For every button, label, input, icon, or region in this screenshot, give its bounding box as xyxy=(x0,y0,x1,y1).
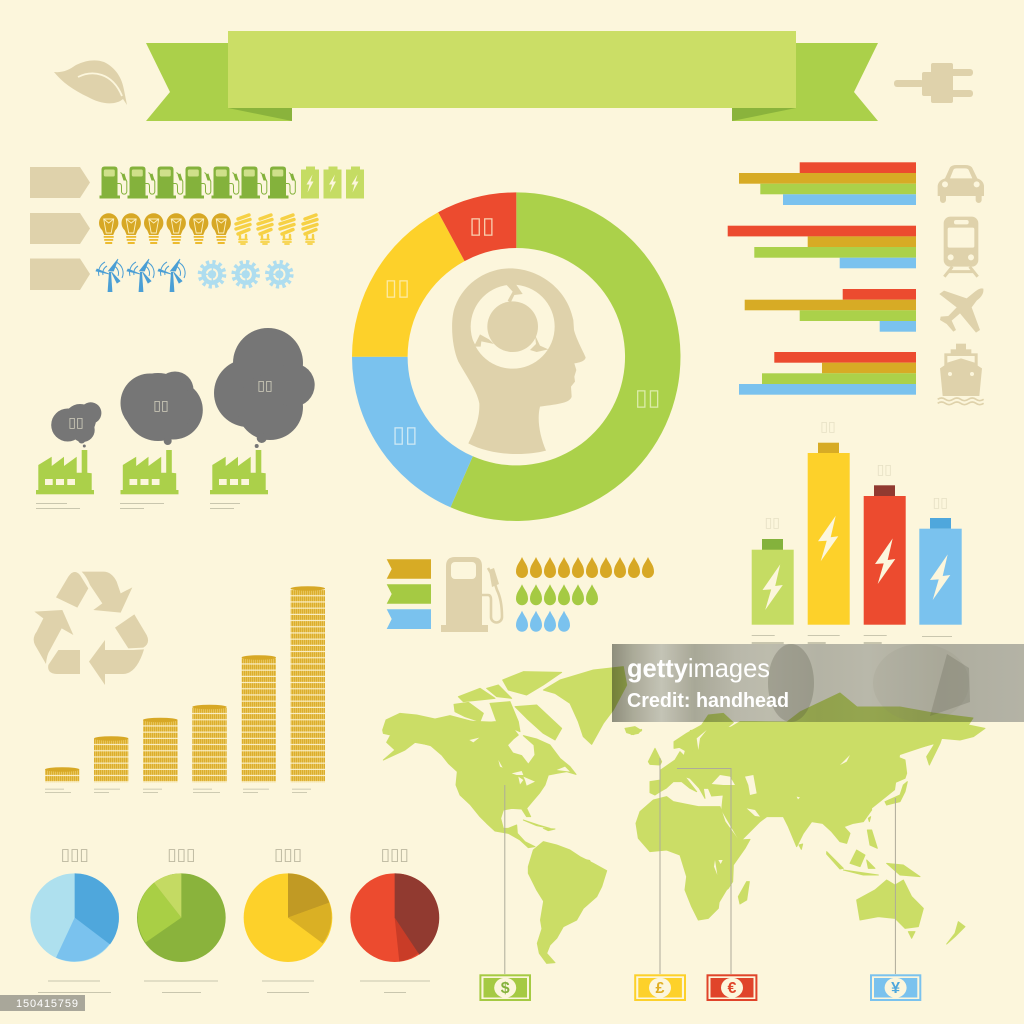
factory with large cloud xyxy=(210,328,315,494)
battery chart: ▯▯ xyxy=(820,419,836,435)
row label tags xyxy=(30,167,90,290)
coin caption lines xyxy=(45,789,311,793)
icon: head with cycle arrows xyxy=(452,268,586,454)
world map xyxy=(383,667,985,963)
donut chart: ▯▯ xyxy=(392,422,418,448)
icons: suns xyxy=(200,262,291,286)
pie chart: blue: ▯▯▯ xyxy=(61,845,89,865)
pie chart: yellow: ▯▯▯ xyxy=(274,845,302,865)
legend flags xyxy=(387,559,431,629)
pie caption lines xyxy=(38,980,430,993)
factory with medium cloud xyxy=(120,372,203,494)
banknote: euro: € xyxy=(728,980,737,997)
factory with large cloud: ▯▯ xyxy=(257,378,273,394)
icon: large fuel pump xyxy=(441,557,502,632)
fuel drops row 2 xyxy=(516,584,598,605)
getty watermark bar: gettyimages xyxy=(627,653,770,683)
battery chart: ▯▯ xyxy=(933,495,948,511)
icons: wind turbines xyxy=(96,259,185,292)
icon: leaf xyxy=(54,60,127,105)
icons: batteries xyxy=(301,166,364,198)
getty watermark bar xyxy=(612,644,1024,722)
factory with medium cloud: ▯▯ xyxy=(153,398,169,414)
ribbon banner xyxy=(146,31,878,121)
donut chart: ▯▯ xyxy=(385,275,410,301)
image id tag xyxy=(0,995,85,1011)
getty watermark bar: Credit: handhead xyxy=(627,690,789,712)
pie chart: red xyxy=(350,845,439,962)
icons: compact fluorescent bulbs xyxy=(236,215,317,244)
stacked bars: car xyxy=(739,162,916,205)
icon: train xyxy=(944,217,978,277)
donut chart xyxy=(352,192,680,521)
battery chart: ▯▯ xyxy=(877,462,892,478)
pie chart: blue xyxy=(30,845,119,962)
factory caption lines xyxy=(36,503,240,509)
fuel drops row 3 xyxy=(516,611,570,632)
banknote: dollar: $ xyxy=(501,980,510,997)
icons: light bulbs xyxy=(99,213,231,244)
image id tag: 150415759 xyxy=(16,998,78,1010)
banknote: dollar xyxy=(480,975,530,1000)
stacked bars: ship xyxy=(739,352,916,395)
donut chart: ▯▯ xyxy=(469,213,495,239)
stacked bars: train xyxy=(728,226,916,268)
currency leader lines xyxy=(505,758,895,974)
icon: ship xyxy=(938,344,984,405)
icons: fuel pumps xyxy=(100,166,295,198)
pie chart: green: ▯▯▯ xyxy=(167,845,195,865)
banknote: pound: £ xyxy=(656,980,665,997)
banknote: pound xyxy=(635,975,685,1000)
banknote: yen xyxy=(871,975,920,1000)
icon: plug xyxy=(894,63,973,103)
coin stacks chart xyxy=(45,586,325,782)
battery chart xyxy=(752,419,962,644)
icon: car xyxy=(938,165,984,203)
battery chart: ▯▯ xyxy=(765,515,780,531)
pie chart: red: ▯▯▯ xyxy=(381,845,409,865)
factory with small cloud xyxy=(36,402,101,494)
donut chart: ▯▯ xyxy=(635,385,660,411)
factory with small cloud: ▯▯ xyxy=(68,415,84,431)
fuel drops row 1 xyxy=(516,557,654,578)
banknote: euro xyxy=(708,975,756,1000)
banknote: yen: ¥ xyxy=(891,980,900,997)
stacked bars: plane xyxy=(745,289,916,332)
pie chart: yellow xyxy=(244,845,332,962)
icon: plane xyxy=(939,288,983,333)
icon: recycle xyxy=(34,572,148,685)
pie chart: green xyxy=(137,845,226,962)
